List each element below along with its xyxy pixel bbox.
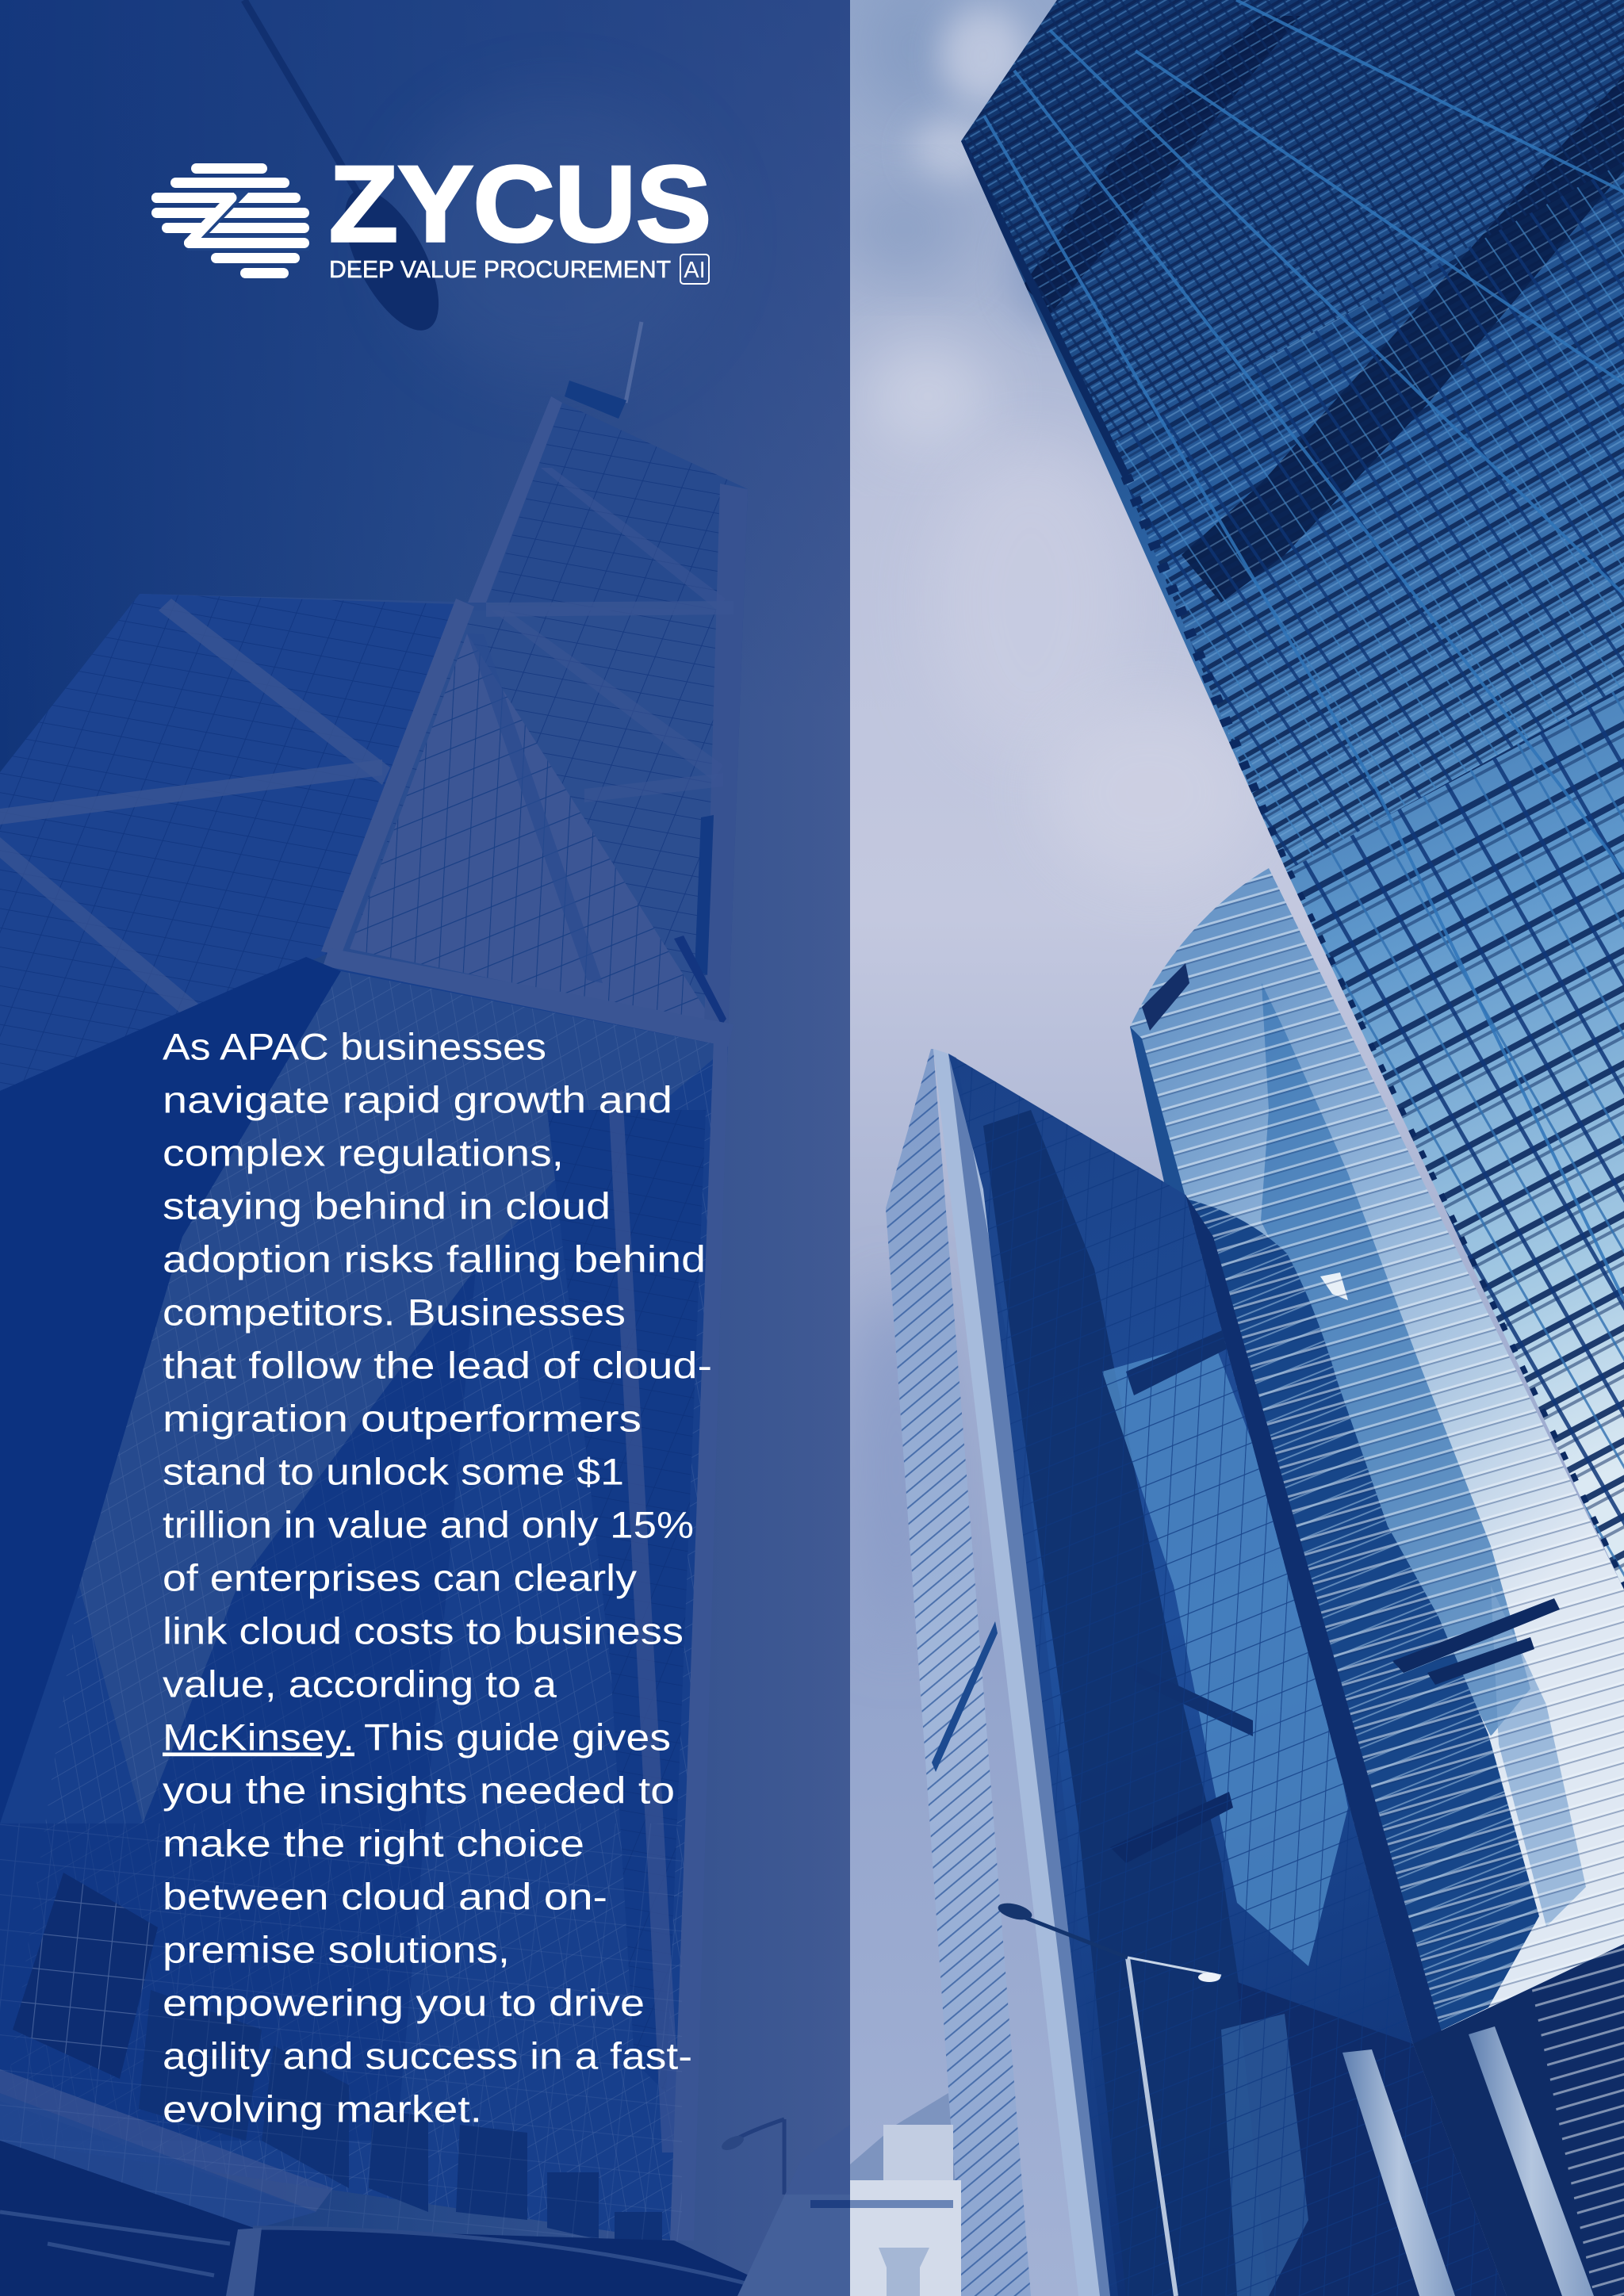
Bank tower silhouette <box>0 322 748 1091</box>
intro paragraph: premise solutions, <box>163 1928 510 1971</box>
AI badge: AI <box>684 258 706 283</box>
intro paragraph: complex regulations, <box>163 1132 564 1173</box>
intro paragraph: you the insights needed to <box>163 1770 675 1811</box>
building base and columns <box>1342 1944 1624 2296</box>
tagline: DEEP VALUE PROCUREMENT <box>329 255 671 283</box>
sky with clouds <box>848 0 1624 2296</box>
intro paragraph: McKinsey. <box>163 1716 354 1758</box>
intro paragraph: of enterprises can clearly <box>163 1557 638 1598</box>
intro paragraph: stand to unlock some $1 <box>163 1451 624 1492</box>
intro paragraph: This guide gives <box>364 1716 671 1758</box>
building: dark glass tower <box>886 1049 1507 2296</box>
intro paragraph: evolving market. <box>163 2088 482 2130</box>
intro paragraph: navigate rapid growth and <box>163 1078 672 1121</box>
intro paragraph: between cloud and on- <box>163 1876 607 1917</box>
intro paragraph: competitors. Businesses <box>163 1291 626 1334</box>
icon: Zycus striped globe <box>151 163 309 278</box>
building: tall curtain wall tower <box>961 0 1624 1590</box>
wordmark: ZYCUS <box>329 144 711 264</box>
logo <box>151 144 711 284</box>
intro paragraph: trillion in value and only 15% <box>163 1503 694 1546</box>
lamp silhouette <box>244 0 458 344</box>
intro paragraph: that follow the lead of cloud- <box>163 1345 712 1386</box>
intro paragraph: link cloud costs to business <box>163 1609 684 1652</box>
street canopy and base <box>0 2141 793 2296</box>
photo: skyline on the right <box>848 0 1624 2296</box>
intro paragraph: staying behind in cloud <box>163 1184 611 1227</box>
panel: dark blue overlay with building photo <box>0 0 850 2296</box>
intro paragraph: migration outperformers <box>163 1397 642 1440</box>
intro paragraph: adoption risks falling behind <box>163 1238 706 1280</box>
lower tower facets <box>0 957 728 2296</box>
street lamp <box>996 1900 1221 2296</box>
intro paragraph: As APAC businesses <box>163 1026 546 1067</box>
hillside and low buildings <box>850 2093 961 2296</box>
intro paragraph <box>163 1026 712 2130</box>
intro paragraph: value, according to a <box>163 1663 557 1705</box>
AI badge <box>680 254 709 284</box>
intro paragraph: empowering you to drive <box>163 1982 645 2023</box>
building: curved glass tower <box>1110 868 1624 2061</box>
intro paragraph: agility and success in a fast- <box>163 2034 692 2077</box>
small lamp and low building <box>719 2119 850 2296</box>
intro paragraph: make the right choice <box>163 1822 584 1865</box>
